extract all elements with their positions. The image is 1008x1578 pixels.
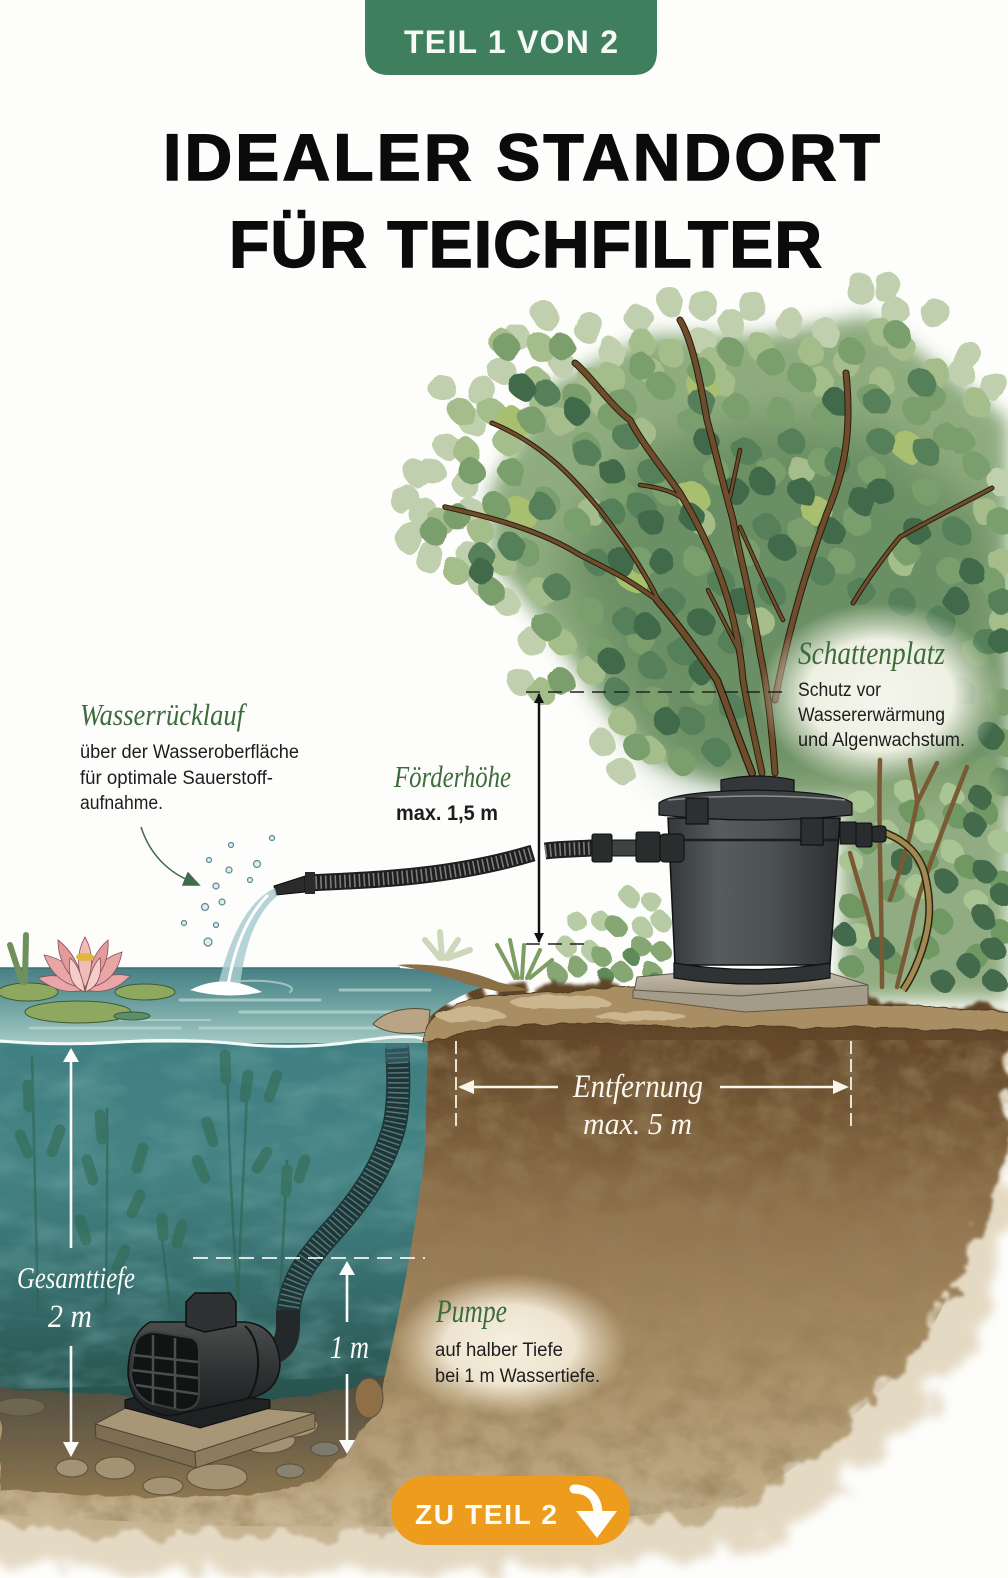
grass tuft <box>497 940 552 978</box>
label: Wasserrücklauf: aufnahme. <box>80 793 163 814</box>
lily stems <box>10 935 26 982</box>
gravel pond bed <box>0 1376 385 1497</box>
shore rock <box>373 1009 430 1033</box>
pond pump <box>125 1293 280 1428</box>
curved pointer arrow <box>141 827 199 885</box>
pump grille <box>131 1332 199 1410</box>
main soil body <box>0 985 1008 1537</box>
soil cross-section <box>0 985 1008 1572</box>
lily flower <box>38 937 130 992</box>
lily pads <box>0 983 175 1023</box>
label: Wasserrücklauf: für optimale Sauerstoff- <box>80 768 273 789</box>
label: Förderhöhe: Förderhöhe <box>393 759 511 794</box>
barrel base ring <box>674 963 830 984</box>
left bush <box>555 895 663 983</box>
label: Schattenplatz: Wassererwärmung <box>798 705 945 726</box>
halo behind Pumpe <box>392 1273 628 1417</box>
ground surface crust <box>397 964 1008 1042</box>
pump body <box>128 1322 280 1416</box>
tree branches <box>445 320 992 773</box>
title: IDEALER STANDORT <box>163 120 880 194</box>
icon: curved arrow <box>574 1489 617 1538</box>
submerged plants <box>20 1051 305 1310</box>
right bush <box>842 760 1008 1000</box>
label: Wasserrücklauf <box>80 697 299 814</box>
halo behind Schattenplatz <box>758 603 1002 787</box>
lid <box>659 790 852 820</box>
pump hose <box>262 1043 398 1356</box>
filter stone base <box>633 973 868 1012</box>
dimension: Gesamttiefe: 2 m <box>48 1299 92 1335</box>
label: Wasserrücklauf: Wasserrücklauf <box>80 697 248 732</box>
tree canopy <box>402 285 1008 800</box>
label: Förderhöhe <box>393 759 511 825</box>
distant reeds on far bank <box>425 932 470 958</box>
pump base plate <box>125 1388 270 1428</box>
dimension: Entfernung: max. 5 m <box>583 1106 692 1141</box>
brown outlet hose <box>885 833 929 990</box>
button: Zu Teil 2: ZU TEIL 2 <box>415 1499 557 1530</box>
surface water <box>0 968 490 1046</box>
title <box>163 120 880 281</box>
dimension: Entfernung: Entfernung <box>572 1069 703 1105</box>
stones <box>0 1378 383 1495</box>
header badge <box>365 0 657 75</box>
dimension: Förderhöhe arrow <box>526 692 782 944</box>
pond water <box>0 968 490 1415</box>
clips <box>686 798 823 845</box>
water lily <box>0 935 175 1023</box>
bush stems <box>850 760 967 987</box>
lid knob <box>721 776 794 794</box>
label: Schattenplatz: und Algenwachstum. <box>798 730 965 751</box>
return hose <box>274 848 592 895</box>
label: Pumpe: auf halber Tiefe <box>435 1340 563 1361</box>
outlet fitting left <box>592 832 684 862</box>
pond filter barrel <box>592 776 886 984</box>
underwater body <box>0 1043 428 1415</box>
header badge: TEIL 1 VON 2 <box>404 24 618 60</box>
water jet and droplets <box>182 836 277 996</box>
label: Pumpe: Pumpe <box>435 1294 507 1330</box>
label: Pumpe: bei 1 m Wassertiefe. <box>435 1366 600 1387</box>
label: Schattenplatz: Schattenplatz <box>798 636 945 672</box>
dimension: Entfernung <box>456 1041 851 1141</box>
pale soil wash <box>0 1012 1008 1572</box>
button: Zu Teil 2 <box>391 1476 630 1545</box>
title: FÜR TEICHFILTER <box>229 207 822 281</box>
dimension: Gesamttiefe: Gesamttiefe <box>17 1260 135 1295</box>
pump handle <box>186 1293 236 1332</box>
dimension: 1 m pump depth: 1 m <box>330 1330 369 1366</box>
outlet fitting right <box>840 822 886 847</box>
stone slab under pump <box>95 1398 315 1468</box>
label: Schattenplatz <box>798 636 965 751</box>
barrel body <box>668 818 840 965</box>
label: Schattenplatz: Schutz vor <box>798 680 882 701</box>
dimension: Gesamttiefe <box>17 1048 135 1457</box>
dimension: 1 m pump depth <box>193 1258 425 1454</box>
label: Pumpe <box>435 1294 600 1387</box>
label: Wasserrücklauf: über der Wasseroberfläche <box>80 742 299 763</box>
label: Förderhöhe: max. 1,5 m <box>396 802 498 825</box>
